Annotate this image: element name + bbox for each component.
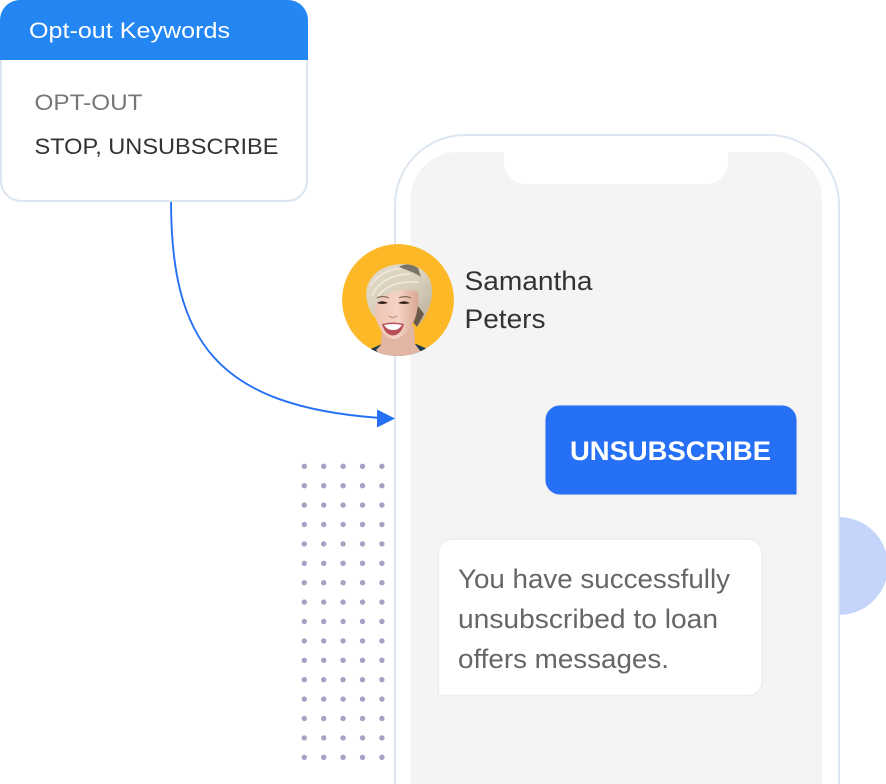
panel: opt-out keywords [0, 0, 308, 201]
received message bubble [438, 539, 762, 696]
bubble shape [545, 405, 797, 495]
shirt [370, 344, 426, 356]
phone outer frame [395, 135, 839, 784]
bubble text: You have successfully [458, 564, 731, 594]
panel header [0, 0, 308, 60]
face [373, 290, 418, 339]
hair shadow at nape [413, 306, 424, 327]
sent message bubble [545, 405, 797, 495]
last name: Peters [464, 304, 546, 334]
label: opt-out: OPT-OUT [34, 90, 143, 115]
nose [389, 316, 397, 318]
eyes [377, 301, 410, 304]
decorative light blue semicircle [839, 517, 886, 615]
connector arrow [171, 200, 395, 428]
fringe [366, 280, 418, 317]
phone notch [504, 152, 728, 184]
dot pattern [302, 464, 385, 760]
received message bubble: offers messages. [458, 644, 669, 674]
bubble shape [438, 539, 762, 696]
avatar background [342, 244, 454, 356]
phone screen [410, 152, 822, 784]
phone mockup [395, 135, 839, 784]
eyebrows [377, 296, 411, 298]
panel body [1, 1, 307, 201]
dark hair root [399, 264, 421, 277]
neck [376, 326, 420, 356]
avatar: Samantha Peters [342, 244, 454, 362]
teeth [384, 324, 402, 330]
hair strands [370, 268, 418, 296]
contact name [464, 266, 593, 334]
heading: Opt-out Keywords [29, 18, 230, 43]
received message bubble: unsubscribed to loan [458, 604, 718, 634]
hair back [366, 264, 432, 327]
first name: Samantha [464, 266, 593, 296]
smile [382, 322, 404, 336]
keywords: STOP, UNSUBSCRIBE [34, 134, 278, 159]
bubble text: UNSUBSCRIBE [570, 436, 771, 466]
